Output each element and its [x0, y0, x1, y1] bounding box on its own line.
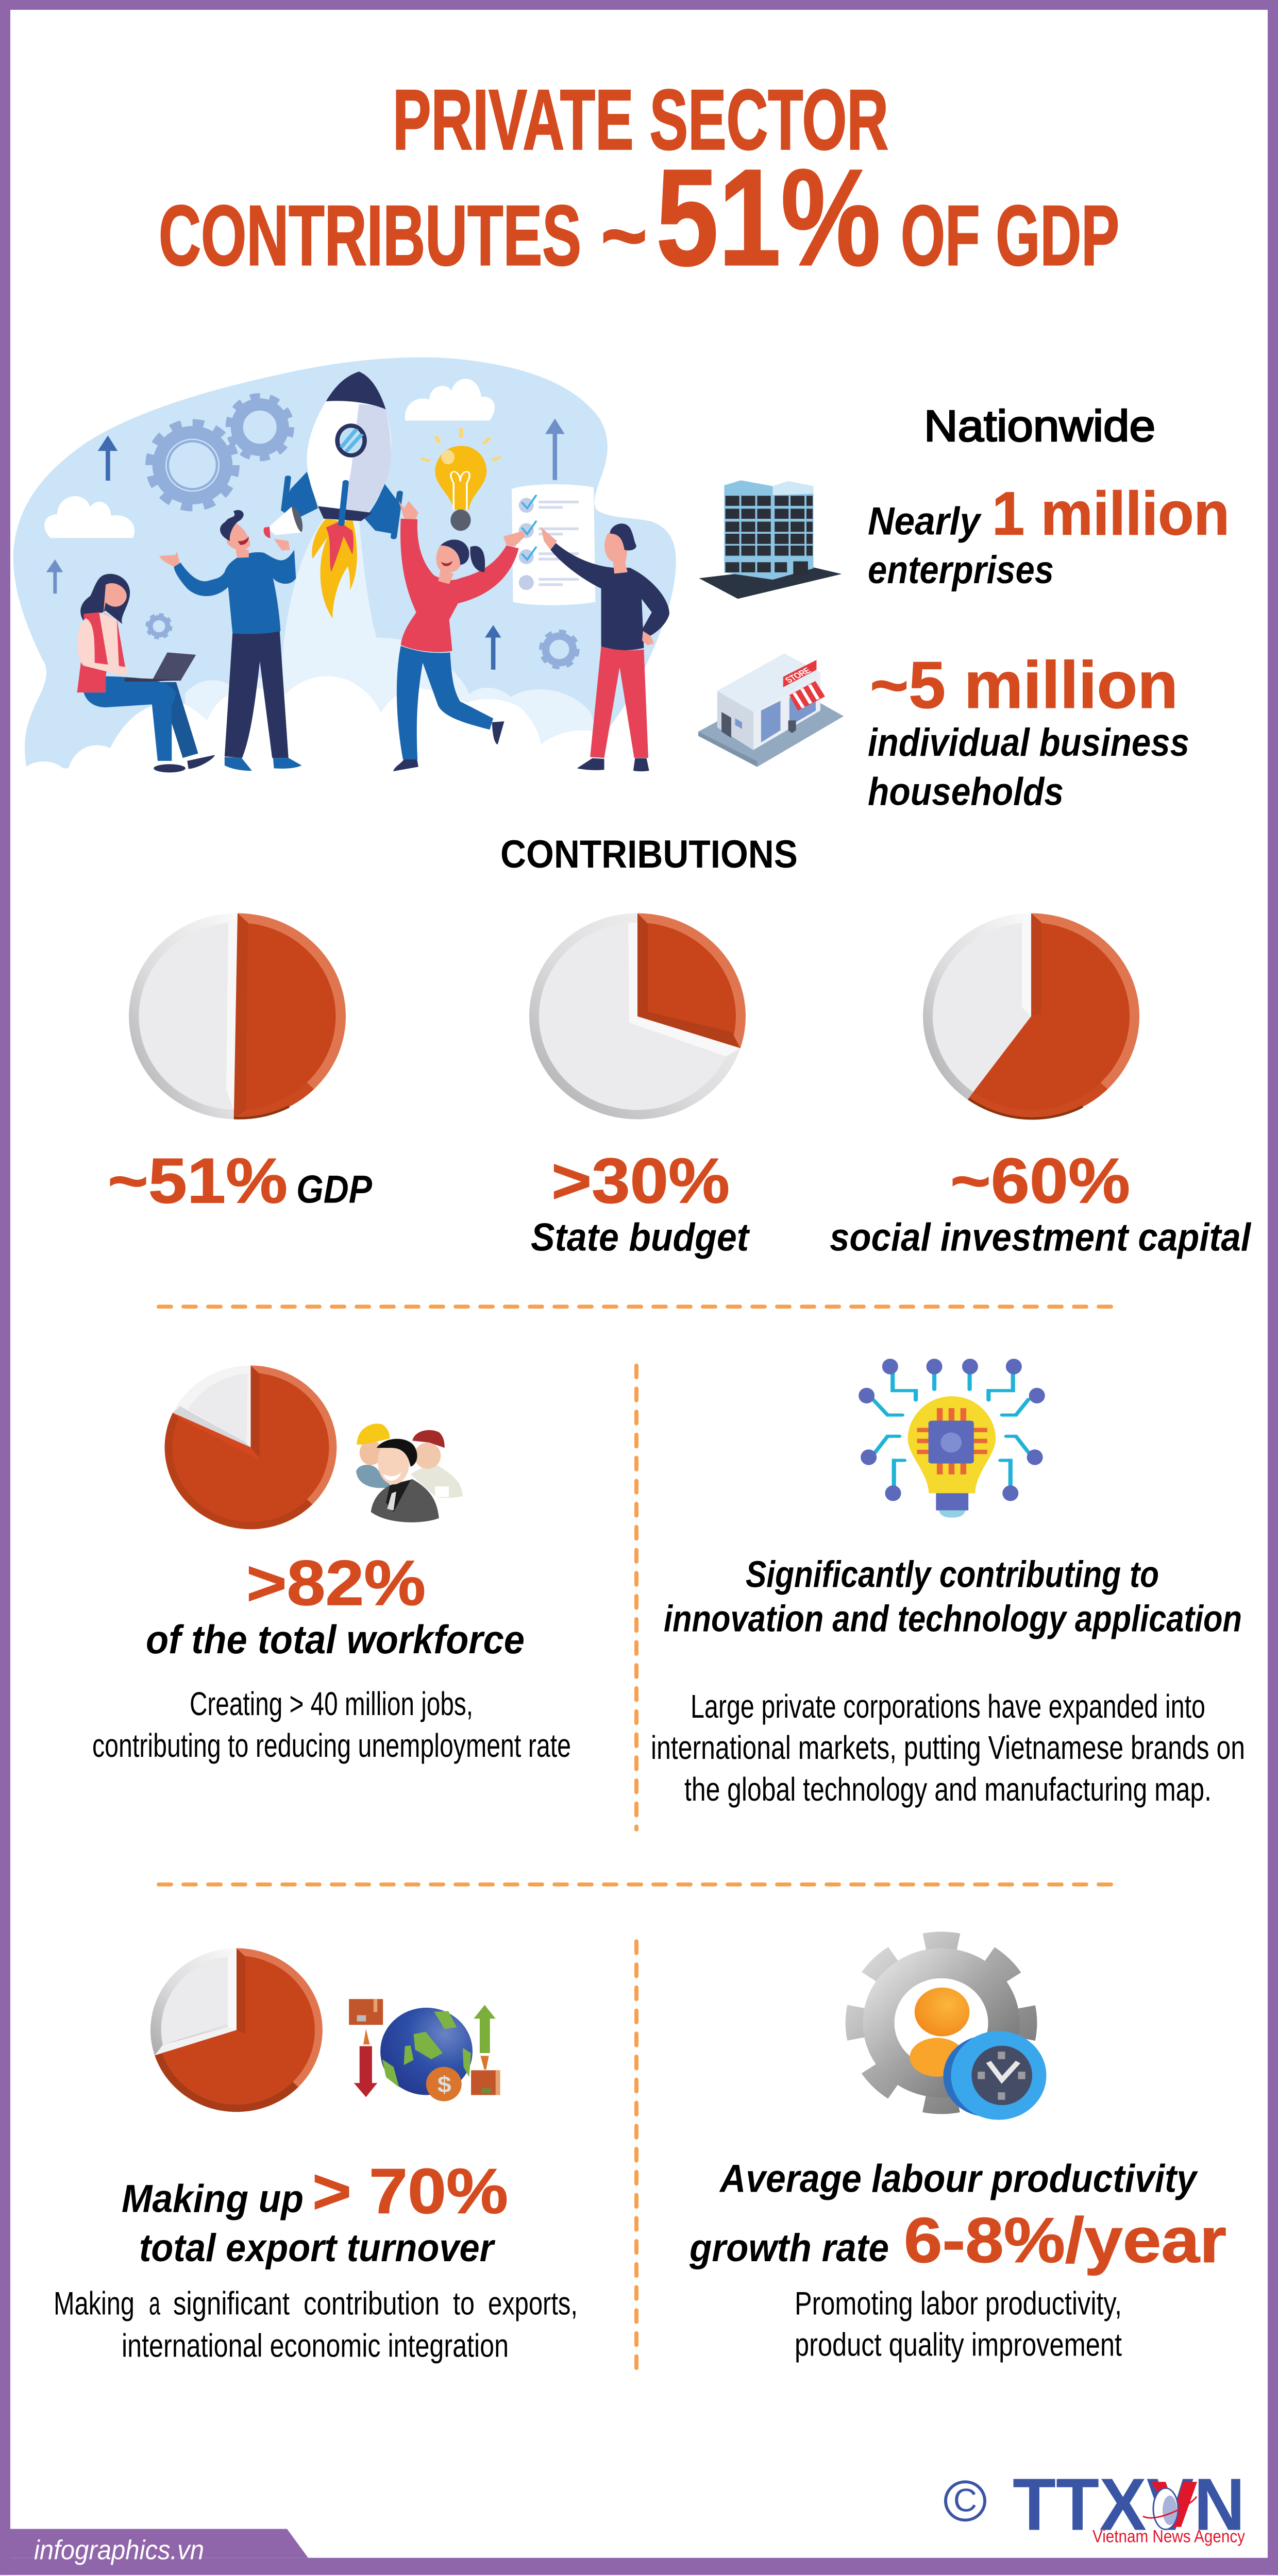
pie chart: 82% workforce [165, 1365, 337, 1529]
stat: labour productivity growth rate: Average labour productivity [719, 2156, 1198, 2200]
title: CONTRIBUTES [159, 188, 581, 283]
panel: labour productivity [689, 1941, 1226, 2363]
heading: innovation and technology [664, 1553, 1242, 1639]
logo: TTXVN Vietnam News Agency: TTXVN [1013, 2464, 1245, 2546]
cheering woman [393, 501, 525, 771]
stat: 5 million individual business households: individual business [868, 720, 1189, 765]
heading: contributions: CONTRIBUTIONS [500, 832, 798, 876]
pie chart: 30% state budget [529, 913, 746, 1120]
title: 51% [656, 141, 881, 294]
icon: workers group [356, 1423, 463, 1522]
stat: 5 million individual business households [868, 648, 1189, 814]
label: ~60% social investment capital: ~60% [950, 1145, 1130, 1216]
text: productivity description [795, 2285, 1122, 2363]
stat: nearly 1 million enterprises: Nearly [868, 499, 982, 543]
person seated with laptop [77, 574, 215, 772]
stat: nearly 1 million enterprises: enterprises [868, 548, 1054, 592]
text: exports description: a [149, 2285, 160, 2321]
text: exports description: international economic integration [122, 2328, 509, 2364]
label: >30% state budget [531, 1145, 750, 1259]
icon: lightbulb with chip [859, 1359, 1045, 1518]
label: ~51% GDP [108, 1145, 373, 1216]
panel: innovation [651, 1359, 1245, 1808]
text: exports description: contribution [304, 2285, 440, 2321]
label: >30% state budget: State budget [531, 1215, 750, 1259]
icon: gear, person and clock [855, 1941, 1046, 2120]
stat: >82% of the total workforce [146, 1547, 525, 1662]
stat: making up >70% total export turnover: total export turnover [139, 2226, 495, 2269]
footer: website: infographics.vn [34, 2535, 204, 2565]
icon: store [698, 653, 844, 767]
icon: store: STORE [783, 666, 813, 685]
pie chart: 70% exports [150, 1948, 323, 2112]
text: corporations description [651, 1688, 1245, 1808]
text: exports description: significant [173, 2285, 290, 2321]
stat: nearly 1 million enterprises: 1 million [992, 479, 1230, 548]
label: ~51% GDP: GDP [296, 1167, 373, 1211]
stat: 5 million individual business households: ~5 million [870, 648, 1178, 722]
text: exports description [54, 2285, 578, 2364]
stat: 5 million individual business households: households [868, 769, 1064, 814]
text: exports description: exports, [488, 2285, 578, 2321]
logo: TTXVN Vietnam News Agency: C [953, 2482, 977, 2518]
stat: making up >70% total export turnover: 70% [369, 2155, 508, 2227]
stat: >82% of the total workforce: >82% [246, 1547, 426, 1618]
man with megaphone [159, 507, 303, 771]
title: OF GDP [901, 188, 1119, 283]
stat: labour productivity growth rate: growth rate [689, 2226, 889, 2269]
heading: innovation and technology: Significantly contributing to [746, 1553, 1159, 1595]
label: >30% state budget: >30% [551, 1145, 730, 1216]
stat: >82% of the total workforce: of the total workforce [146, 1617, 525, 1662]
label: ~60% social investment capital [830, 1145, 1252, 1259]
panel: exports [54, 1948, 578, 2364]
stat: making up >70% total export turnover: Making up [122, 2176, 304, 2221]
panel: workforce [92, 1365, 571, 1764]
text: productivity description: product quality improvement [795, 2327, 1122, 2363]
icon: office building [699, 480, 842, 599]
text: jobs description: Creating > 40 million jobs, [190, 1686, 473, 1722]
stat: labour productivity growth rate [689, 2156, 1226, 2276]
text: jobs description [92, 1686, 571, 1764]
pie chart: 60% social investment capital [923, 913, 1139, 1120]
text: exports description: Making [54, 2285, 134, 2321]
icon: global trade [349, 1999, 500, 2101]
label: ~51% GDP: ~51% [108, 1145, 288, 1216]
logo: TTXVN Vietnam News Agency: Vietnam News Agency [1092, 2527, 1245, 2546]
icon: global trade: $ [438, 2072, 451, 2097]
stat: labour productivity growth rate: 6-8%/year [904, 2205, 1226, 2276]
text: jobs description: contributing to reducing unemployment rate [92, 1727, 571, 1764]
illustration: team launching a rocket [13, 357, 676, 809]
text: exports description: to [453, 2285, 475, 2321]
title: ~ [601, 188, 647, 283]
panel: nationwide [698, 401, 1230, 814]
title [159, 72, 1119, 294]
heading: Nationwide: Nationwide [924, 401, 1155, 450]
title: PRIVATE SECTOR [393, 72, 888, 167]
text: productivity description: Promoting labor productivity, [795, 2285, 1122, 2321]
stat: nearly 1 million enterprises [868, 479, 1230, 592]
pie chart: 51% GDP [129, 913, 346, 1120]
man pointing at checklist [541, 523, 669, 771]
stat: making up >70% total export turnover: > [312, 2155, 351, 2227]
stat: making up >70% total export turnover [122, 2155, 508, 2269]
